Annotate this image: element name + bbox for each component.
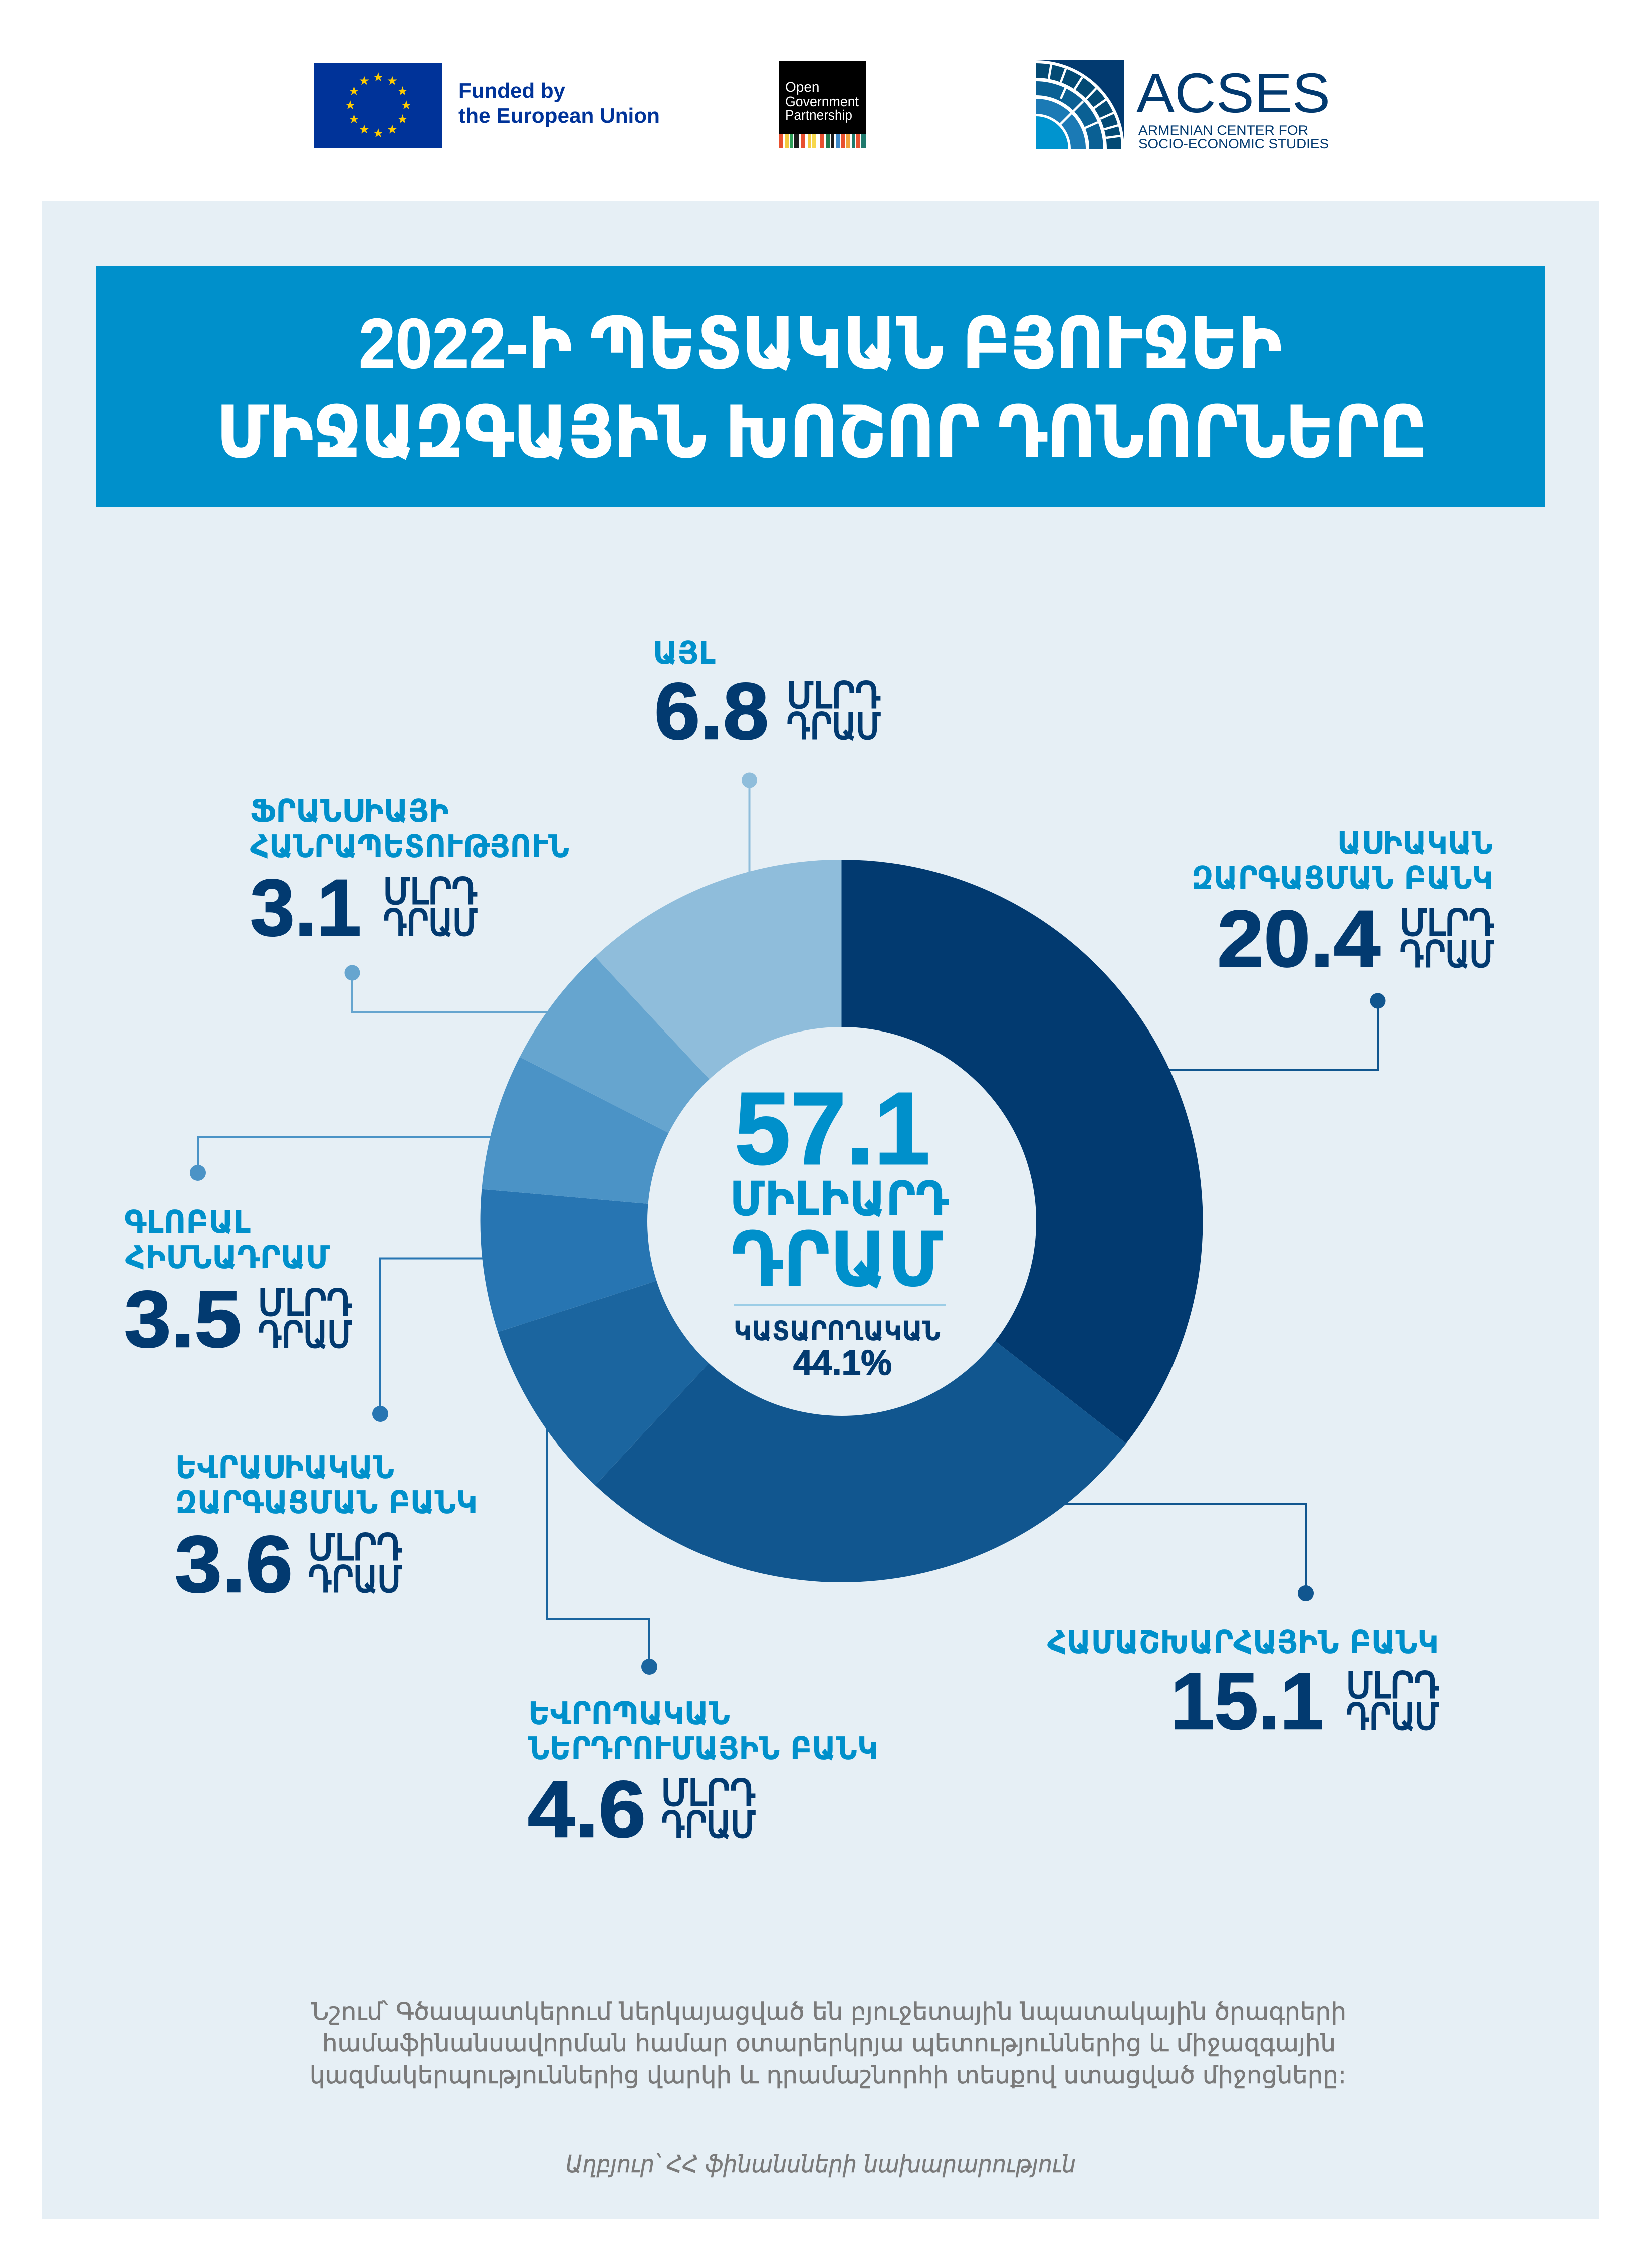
donut chart xyxy=(481,860,1203,1582)
label: Global Fund 3.5: ՄԼՐԴ xyxy=(258,1282,352,1324)
label: Eurasian Development Bank 3.6: ԴՐԱՄ xyxy=(308,1558,402,1600)
label: World Bank 15.1: ՄԼՐԴ xyxy=(1346,1664,1439,1706)
label: France 3.1: ՖՐԱՆՍԻԱՅԻ xyxy=(250,793,449,830)
label: Global Fund 3.5 xyxy=(124,1204,352,1364)
label: Asian Development Bank 20.4 xyxy=(1192,824,1494,983)
leader line: Global Fund xyxy=(190,1137,511,1181)
segment: Eurasian Development Bank 3.6 xyxy=(481,1189,842,1332)
logo: ACSES: SOCIO-ECONOMIC STUDIES xyxy=(1138,136,1329,151)
leader line: other xyxy=(742,773,757,892)
center total: ՄԻԼԻԱՐԴ xyxy=(730,1172,949,1227)
source text: Աղբյուր՝ ՀՀ ֆինանսների նախարարություն xyxy=(566,2150,1076,2178)
note text: համաֆինանսավորման համար օտարերկրյա պետություններից և միջազգային xyxy=(322,2029,1336,2057)
center total: 57.1 xyxy=(735,1071,930,1186)
label: Asian Development Bank 20.4: ԴՐԱՄ xyxy=(1400,933,1494,975)
label: other 6.8: 6.8 xyxy=(654,666,769,756)
leader line: European Investment Bank xyxy=(547,1403,657,1675)
title banner: ՄԻՋԱԶԳԱՅԻՆ ԽՈՇՈՐ ԴՈՆՈՐՆԵՐԸ xyxy=(216,392,1427,472)
segment: France 3.1 xyxy=(520,957,842,1221)
donut hole xyxy=(647,1027,1036,1416)
label: World Bank 15.1: 15.1 xyxy=(1170,1656,1324,1746)
center total: ԿԱՏԱՐՈՂԱԿԱՆ xyxy=(734,1315,941,1347)
label: France 3.1: ՀԱՆՐԱՊԵՏՈՒԹՅՈՒՆ xyxy=(250,828,569,865)
logo: Open Government Partnership: Government xyxy=(785,94,859,109)
note text: Նշում՝ Գծապատկերում ներկայացված են բյուջետային նպատակային ծրագրերի xyxy=(311,1998,1346,2026)
label: France 3.1: ՄԼՐԴ xyxy=(383,870,478,912)
label: European Investment Bank 4.6: ԴՐԱՄ xyxy=(661,1804,756,1846)
label: other 6.8: ԴՐԱՄ xyxy=(787,705,881,747)
label: Asian Development Bank 20.4: ԶԱՐԳԱՑՄԱՆ ԲԱՆԿ xyxy=(1192,860,1493,896)
segment: World Bank 15.1 xyxy=(595,1221,1126,1582)
logo: EU funded by: the European Union xyxy=(458,104,660,127)
label: France 3.1: 3.1 xyxy=(250,863,361,952)
label: World Bank 15.1: ԴՐԱՄ xyxy=(1346,1696,1439,1738)
center total: 44.1% xyxy=(793,1343,892,1383)
note text: կազմակերպություններից վարկի և դրամաշնորհի տեսքով ստացված միջոցները: xyxy=(310,2061,1346,2089)
label: European Investment Bank 4.6: ՆԵՐԴՐՈՒՄԱՅԻՆ ԲԱՆԿ xyxy=(528,1730,878,1767)
label: other 6.8: ԱՅԼ xyxy=(653,635,716,671)
logo: Open Government Partnership: Partnership xyxy=(785,107,852,123)
label: Eurasian Development Bank 3.6: ԵՎՐԱՍԻԱԿԱՆ xyxy=(175,1449,394,1486)
leader line: Asian Development Bank xyxy=(1152,993,1386,1070)
logo: Open Government Partnership xyxy=(779,61,866,148)
label: Global Fund 3.5: ԴՐԱՄ xyxy=(258,1314,352,1356)
center total xyxy=(730,1071,949,1383)
label: European Investment Bank 4.6 xyxy=(528,1695,878,1854)
logo: EU funded by: Funded by xyxy=(458,79,566,102)
logo: ACSES: ARMENIAN CENTER FOR xyxy=(1138,123,1308,138)
segment: Global Fund 3.5 xyxy=(482,1057,842,1221)
leader line: Eurasian Development Bank xyxy=(372,1258,501,1422)
logo: EU funded by xyxy=(314,63,660,148)
segment: other 6.8 xyxy=(595,860,842,1221)
logo: ACSES xyxy=(1036,60,1328,149)
label: World Bank 15.1 xyxy=(1047,1624,1439,1746)
label: Global Fund 3.5: ՀԻՄՆԱԴՐԱՄ xyxy=(125,1239,330,1276)
label: Asian Development Bank 20.4: ԱՍԻԱԿԱՆ xyxy=(1337,824,1493,861)
label: Global Fund 3.5: ԳԼՈԲԱԼ xyxy=(124,1204,251,1241)
label: European Investment Bank 4.6: ՄԼՐԴ xyxy=(661,1772,756,1814)
label: France 3.1 xyxy=(250,793,569,952)
label: World Bank 15.1: ՀԱՄԱՇԽԱՐՀԱՅԻՆ ԲԱՆԿ xyxy=(1047,1624,1439,1661)
label: Asian Development Bank 20.4: 20.4 xyxy=(1217,894,1380,983)
label: Eurasian Development Bank 3.6: ԶԱՐԳԱՑՄԱՆ ԲԱՆԿ xyxy=(175,1484,478,1521)
segment: Asian Development Bank 20.4 xyxy=(842,860,1203,1444)
leader line: France xyxy=(345,965,571,1012)
note text xyxy=(310,1998,1346,2089)
label: Eurasian Development Bank 3.6: ՄԼՐԴ xyxy=(308,1526,402,1568)
label: Global Fund 3.5: 3.5 xyxy=(124,1274,242,1364)
logo: Open Government Partnership: Open xyxy=(785,79,820,95)
label: France 3.1: ԴՐԱՄ xyxy=(383,902,478,944)
title banner xyxy=(96,266,1545,507)
label: other 6.8: ՄԼՐԴ xyxy=(787,674,881,716)
leader line: World Bank xyxy=(1052,1504,1314,1601)
label: European Investment Bank 4.6: 4.6 xyxy=(528,1764,646,1854)
segment: European Investment Bank 4.6 xyxy=(498,1221,842,1485)
label: European Investment Bank 4.6: ԵՎՐՈՊԱԿԱՆ xyxy=(528,1695,730,1732)
label: Asian Development Bank 20.4: ՄԼՐԴ xyxy=(1400,902,1494,944)
center total: ԴՐԱՄ xyxy=(731,1216,943,1304)
label: Eurasian Development Bank 3.6: 3.6 xyxy=(175,1519,293,1609)
title banner: 2022-Ի ՊԵՏԱԿԱՆ ԲՅՈՒՋԵԻ xyxy=(359,304,1282,383)
label: other 6.8 xyxy=(653,635,881,756)
label: Eurasian Development Bank 3.6 xyxy=(175,1449,478,1609)
logo: ACSES: ACSES xyxy=(1136,62,1330,124)
